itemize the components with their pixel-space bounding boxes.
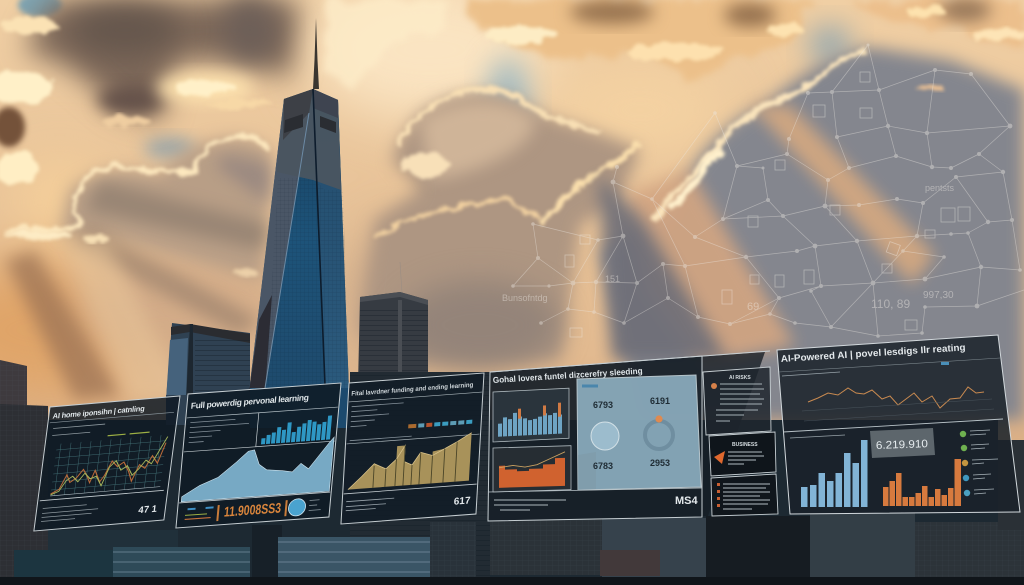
skyscraper: mid-left block <box>166 323 250 400</box>
panel 3 chips <box>408 420 472 428</box>
panel 3 notes <box>350 402 414 441</box>
facade creases <box>313 89 325 385</box>
panel 2 donut <box>288 498 306 516</box>
side card C <box>711 474 778 516</box>
panel 4 footer notes <box>494 500 566 510</box>
panel 1 line chart <box>50 431 169 496</box>
panel 5 metric box: 6.219.910 <box>876 438 928 452</box>
skyscraper: right block with antenna <box>358 262 428 385</box>
network floating labels: 110, 89 <box>871 297 910 311</box>
panel 5 blue bar chart <box>801 440 868 507</box>
centre figures: 2953 <box>650 458 670 468</box>
panel 5 metric box <box>870 428 935 458</box>
clouds: large right bank with rays <box>598 47 1024 420</box>
network floating labels: Bunsofntdg <box>502 293 548 303</box>
panel 5 icon legend <box>960 430 998 496</box>
centre dial: left <box>591 422 619 450</box>
panel 2 big number: 11.9008SS3 <box>223 500 282 520</box>
panel 4 footer code: MS4 <box>675 495 698 507</box>
skyscraper: small left tower top <box>0 360 27 410</box>
network nodes <box>511 44 1022 338</box>
clouds: centre stack <box>360 88 640 370</box>
panel 2: personal learning dashboard <box>176 383 341 528</box>
panel 3 notes lower <box>346 498 394 511</box>
network floating labels: 69 <box>747 301 759 313</box>
clouds: middle left with light rays <box>2 136 272 400</box>
panel 4 light centre panel <box>577 375 701 490</box>
side card A <box>703 367 771 435</box>
side card B: BUSINESS <box>732 442 758 448</box>
main skyscraper <box>249 18 349 392</box>
network small document icons <box>565 72 970 337</box>
panel 1 notes <box>41 424 109 521</box>
panel 2 notes <box>189 418 249 443</box>
main tower facade <box>249 89 349 392</box>
panel 3 figure: 617 <box>453 495 471 508</box>
panel 4: global funnel discovery dashboard <box>488 351 770 521</box>
panel 2 blue bar chart <box>261 415 332 444</box>
panel 5 line chart <box>802 387 994 421</box>
panel 3 title: Fital lavrdner funding and ending learning <box>351 382 474 398</box>
panel 1 figure: 47 1 <box>138 504 158 516</box>
panel 5 title: AI-Powered AI | povel lesdigs Ilr reating <box>780 342 966 365</box>
network constellation overlay <box>502 44 1024 338</box>
panel 3: gold performance chart <box>341 373 484 524</box>
centre figures: 6783 <box>593 461 613 471</box>
network floating labels: 151 <box>605 274 620 284</box>
network floating labels: pentsts <box>925 183 955 193</box>
panel 3 gold bar chart <box>348 433 472 490</box>
roof louvres <box>284 114 303 133</box>
panel 5 orange bar chart <box>883 459 961 506</box>
centre figures <box>593 396 670 471</box>
panel 1 title: AI home iponsihn | catnling <box>52 404 146 421</box>
panel 5: AI-powered lending reporting <box>777 335 1020 514</box>
panel 4 title: Gohal lovera funtel dizcerefry sleeding <box>492 366 643 385</box>
panel 2 legend strokes <box>188 507 214 509</box>
centre figures: 6191 <box>650 396 670 406</box>
network links <box>513 45 1024 336</box>
network floating labels <box>502 183 955 313</box>
clouds: upper left dark mass <box>0 0 300 184</box>
clouds: top band <box>325 0 1024 90</box>
network floating labels: 997,30 <box>923 290 954 301</box>
side card B <box>709 432 776 476</box>
lower city skyline <box>0 372 1024 585</box>
centre dial: right <box>645 415 673 449</box>
side card A: AI RISKS <box>729 375 751 381</box>
panel 1: AI home lending chart <box>34 396 180 531</box>
spire <box>313 18 319 89</box>
panel 4 blue and orange bars <box>493 388 569 442</box>
sun-lit upper facade <box>277 89 341 190</box>
panel 2 area chart <box>181 437 334 502</box>
panel 4 orange bar chart <box>493 446 571 492</box>
panel 2 title: Full powerdig pervonal learning <box>190 392 309 411</box>
centre figures: 6793 <box>593 400 613 410</box>
